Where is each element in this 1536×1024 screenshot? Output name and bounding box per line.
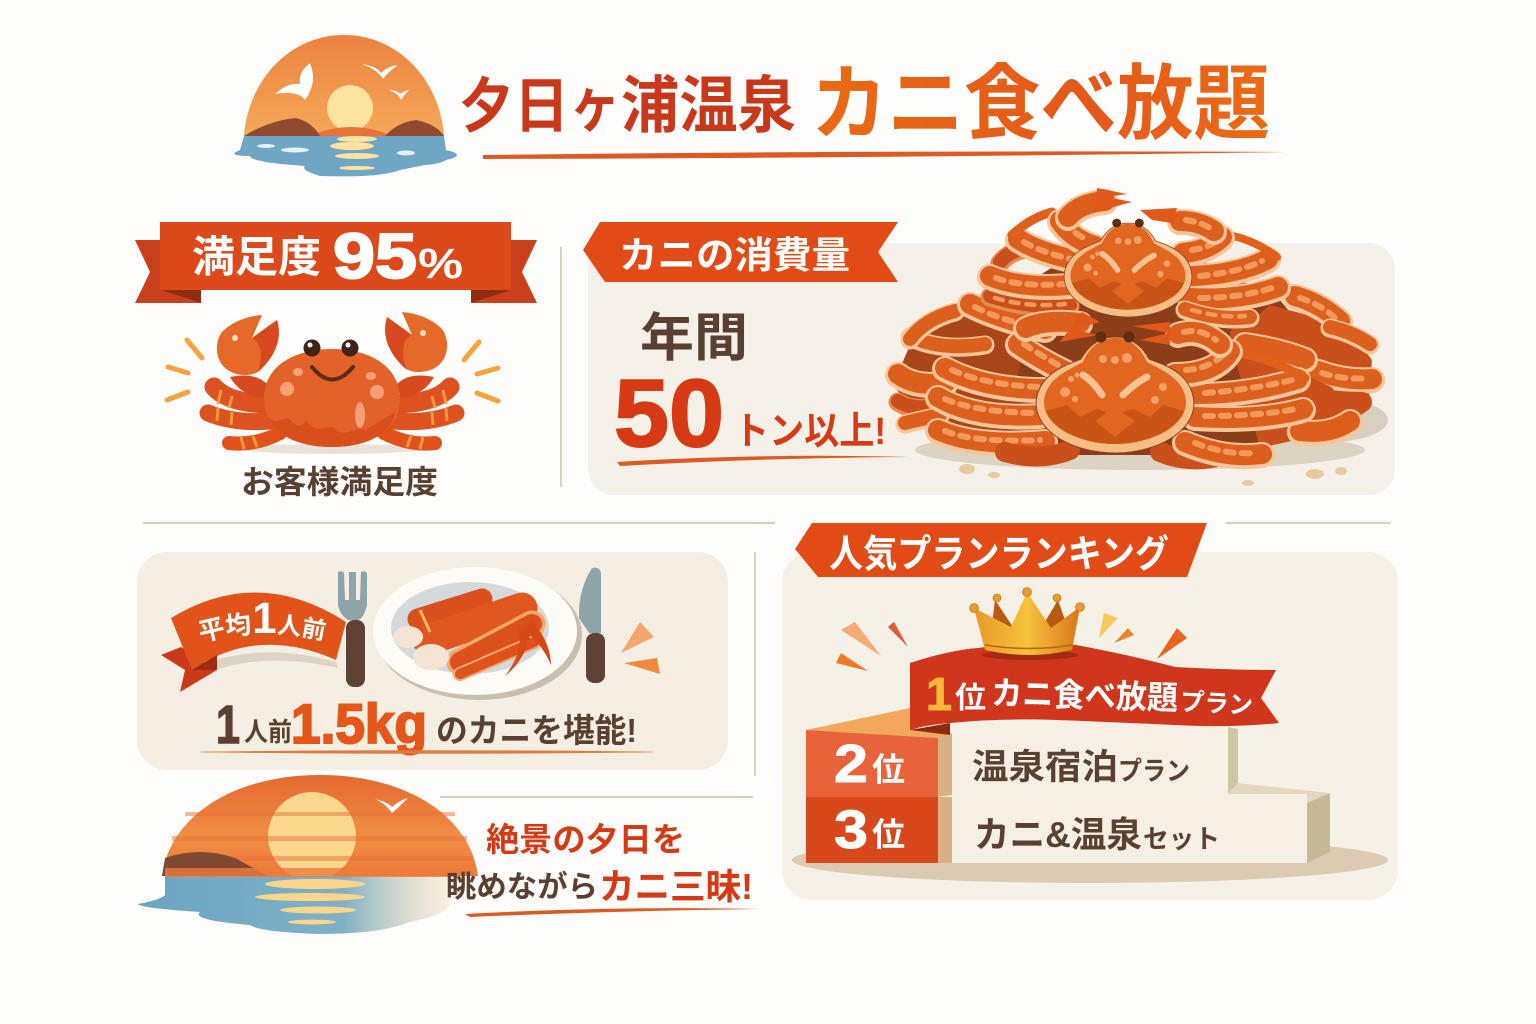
- underline: [200, 750, 653, 754]
- title: カニ食べ放題: [811, 59, 1270, 150]
- title: [459, 59, 1270, 150]
- ribbon: rank 1: [910, 643, 1279, 735]
- accent sparks: [836, 613, 1187, 671]
- block: rank 3: [806, 783, 1330, 863]
- illustration: pile of crabs: [893, 188, 1388, 486]
- underline: [465, 908, 760, 917]
- icon: plate of crab legs: [373, 567, 582, 700]
- big number: 50 tons: [614, 360, 886, 467]
- ribbon: satisfaction 95%: %: [418, 240, 463, 288]
- text: 1.5kg per person: 人前: [244, 717, 292, 747]
- block: rank 3: セット: [1143, 824, 1220, 854]
- tag: ranking heading: 人気プランランキング: [829, 534, 1169, 576]
- icon: knife: [579, 568, 605, 683]
- tag: crab consumption heading: カニの消費量: [619, 235, 850, 276]
- title: ヶ: [570, 72, 620, 139]
- block: rank 2: 位: [872, 751, 905, 788]
- podium shadow: [792, 837, 1388, 883]
- big number: 50 tons: 50: [614, 360, 724, 467]
- text: superb sunset: カニ三昧!: [599, 866, 753, 907]
- ribbon: rank 1: カニ食べ放題: [991, 675, 1179, 716]
- text: superb sunset: [446, 821, 753, 907]
- ribbon: rank 1: 位: [955, 682, 986, 715]
- block: rank 2: 2: [834, 734, 868, 794]
- big number: 50 tons: トン以上!: [734, 411, 886, 453]
- panel: crab consumption: [583, 222, 1395, 495]
- block: rank 2: [806, 708, 1238, 797]
- top crab: [990, 188, 1278, 319]
- title: 夕日: [459, 73, 569, 140]
- ribbon: satisfaction 95%: [135, 220, 537, 303]
- text: superb sunset: 絶景の夕日を: [486, 821, 685, 858]
- accent sparks: [621, 622, 660, 674]
- block: rank 3: 位: [872, 816, 905, 853]
- block: rank 2: プラン: [1118, 756, 1190, 786]
- back legs: [898, 248, 1372, 433]
- illustration: sunset over the sea: [138, 775, 478, 934]
- icon: fork: [338, 571, 367, 687]
- bottom crab: [938, 312, 1305, 459]
- ribbon: rank 1: プラン: [1179, 688, 1254, 720]
- text: superb sunset: 眺めながら: [446, 870, 598, 904]
- caption: customer satisfaction: お客様満足度: [241, 464, 438, 500]
- text: 1.5kg per person: 1: [216, 695, 240, 755]
- block: rank 3: 3: [834, 800, 868, 860]
- icon: crown: [970, 588, 1084, 660]
- text: 1.5kg per person: のカニを堪能!: [436, 712, 637, 749]
- title underline: [483, 151, 1286, 159]
- text: per year: 年間: [640, 310, 748, 368]
- text: 1.5kg per person: [216, 692, 637, 755]
- ribbon: satisfaction 95%: 95: [333, 220, 417, 292]
- ribbon: satisfaction 95%: 満足度: [192, 234, 321, 282]
- title: 浦温泉: [621, 72, 796, 141]
- block: rank 2: 温泉宿泊: [972, 748, 1118, 787]
- tag: crab consumption heading: [583, 222, 898, 282]
- header logo: sunset over sea: [234, 35, 457, 176]
- ribbon: average per person: 平均1人前: [198, 602, 326, 642]
- text: 1.5kg per person: 1.5kg: [291, 692, 427, 755]
- underline: [617, 456, 910, 466]
- panel: popular plan ranking: [782, 523, 1398, 900]
- block: rank 3: カニ&温泉: [974, 814, 1142, 855]
- ribbon: average per person: [161, 592, 346, 692]
- icon: smiling crab: [167, 312, 498, 454]
- panel: average portion: [137, 552, 728, 770]
- ribbon: rank 1: 1: [926, 668, 952, 720]
